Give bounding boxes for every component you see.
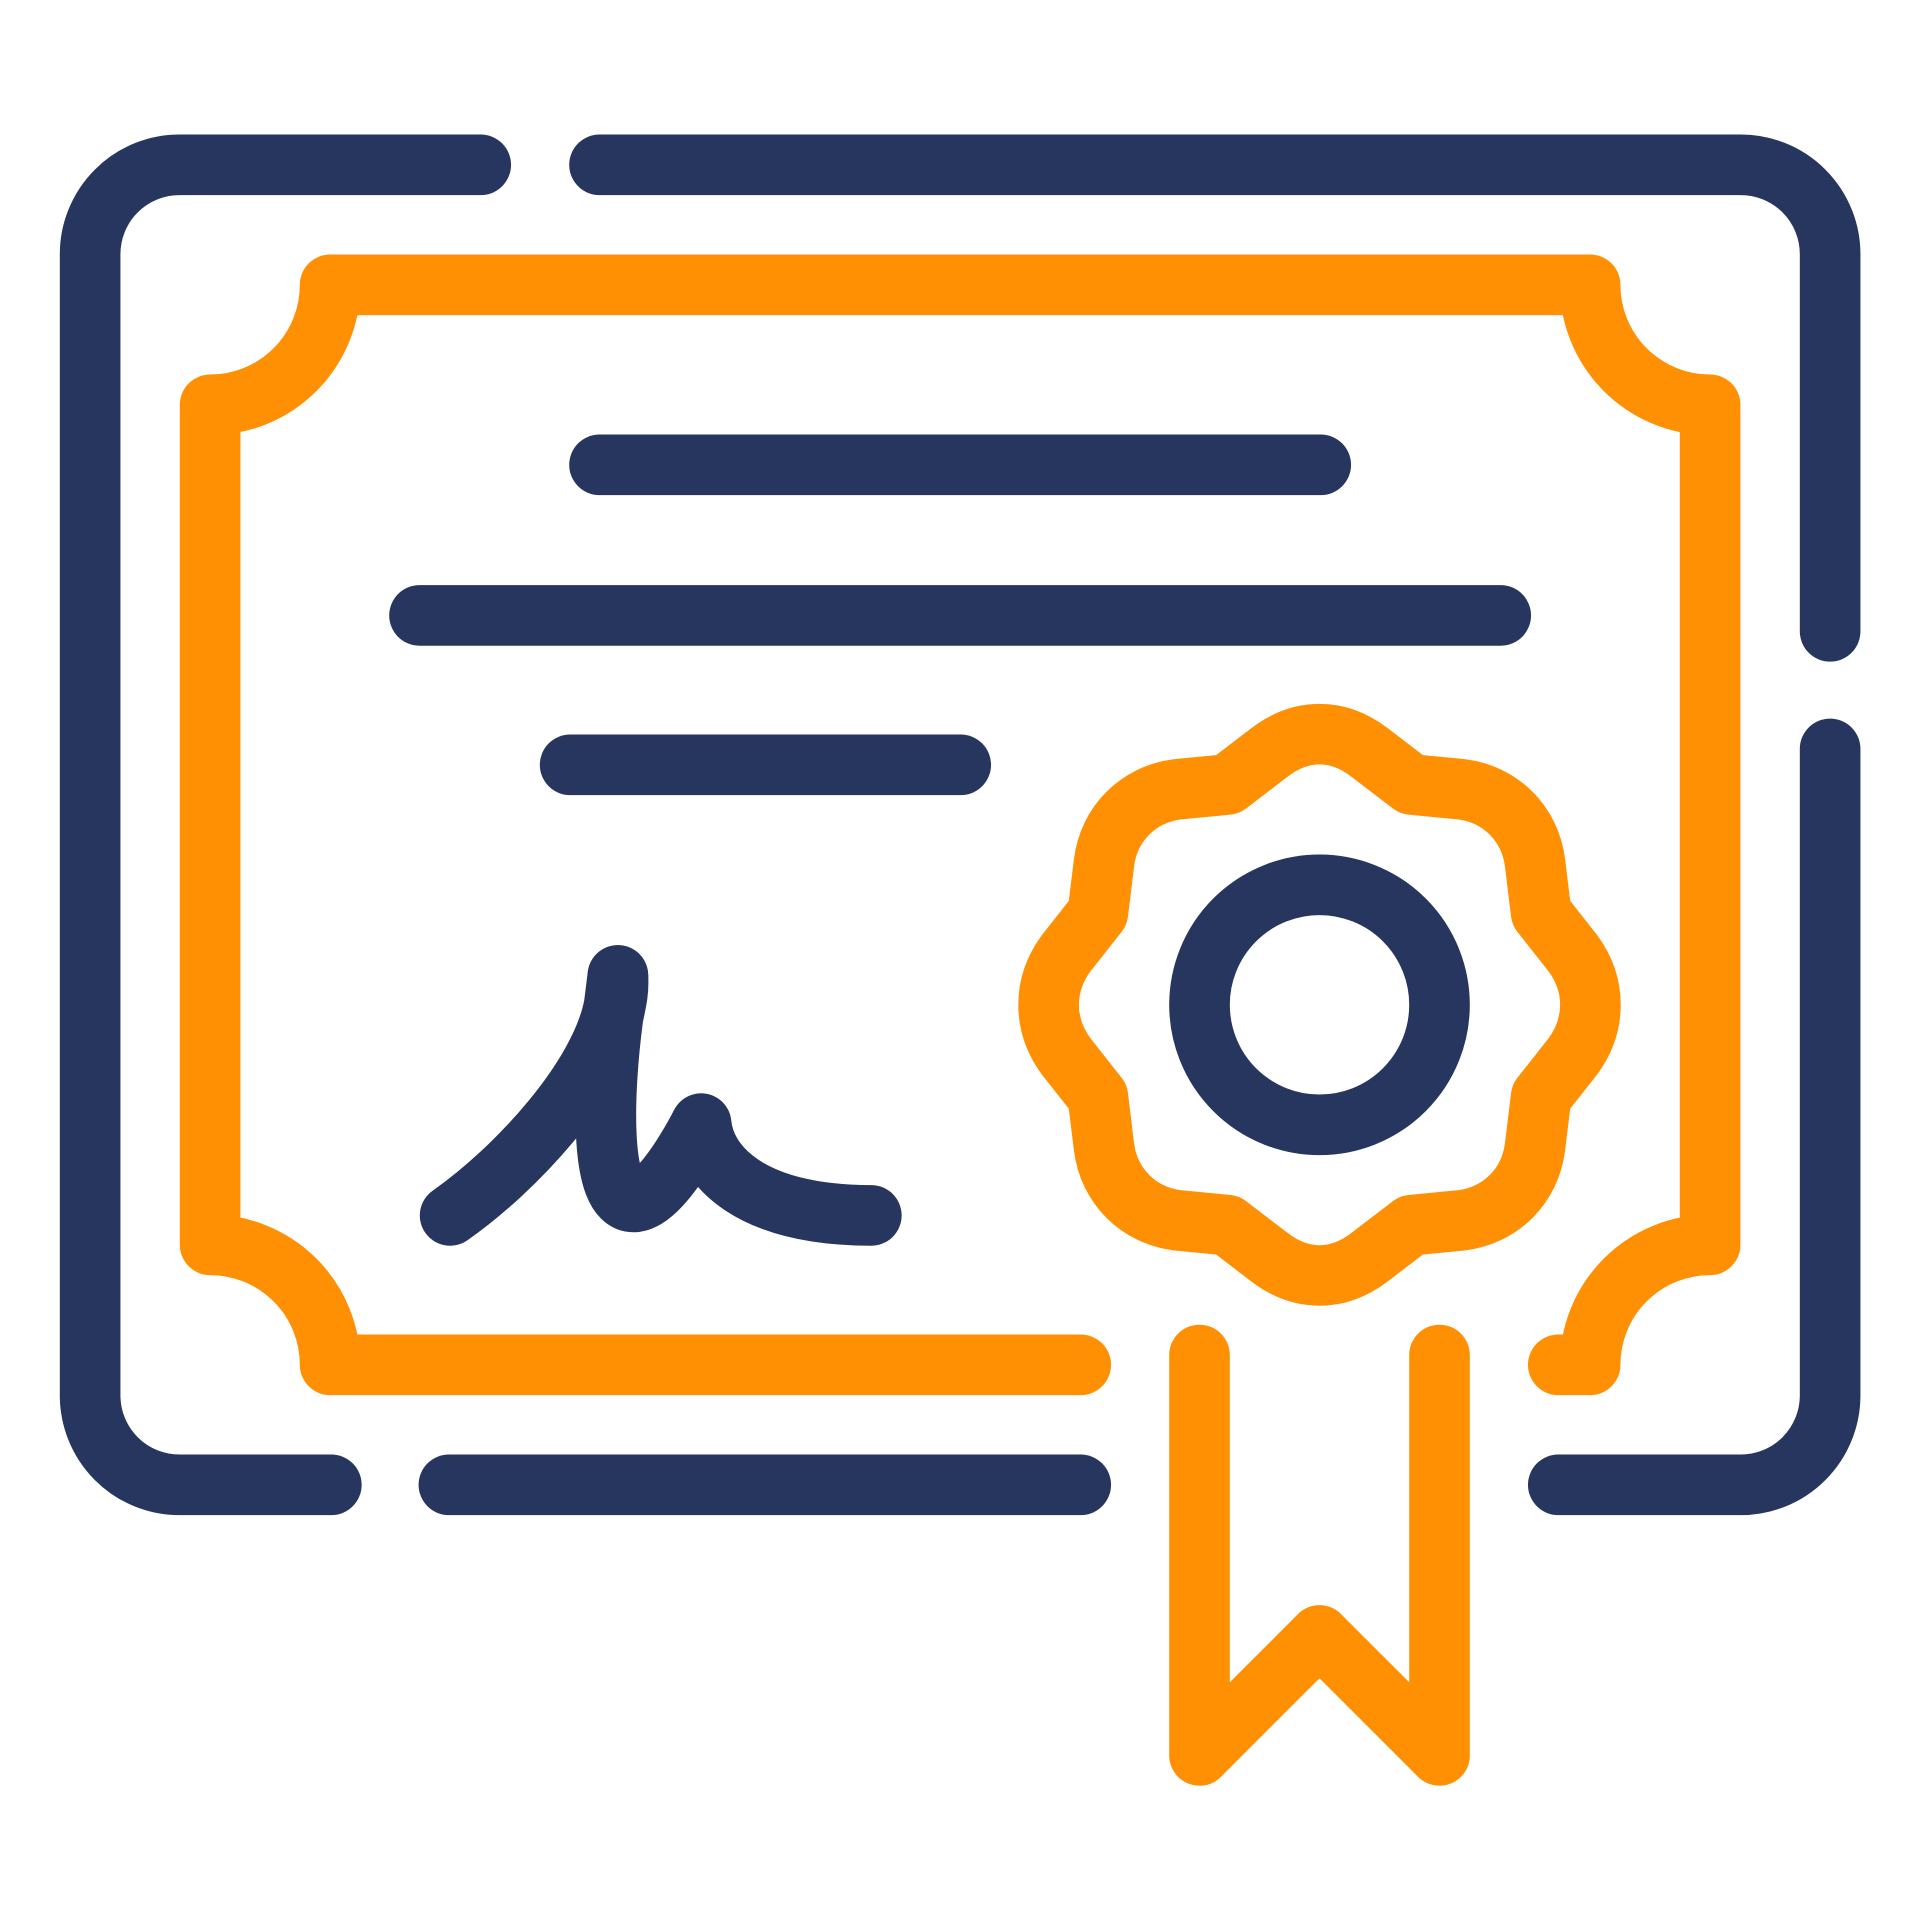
seal badge <box>1049 734 1590 1275</box>
ribbon <box>1200 1355 1440 1755</box>
seal inner circle <box>1200 885 1440 1125</box>
certificate border <box>210 285 1710 1365</box>
signature <box>450 975 871 1215</box>
text lines <box>420 465 1501 765</box>
outer frame <box>90 165 1830 1485</box>
